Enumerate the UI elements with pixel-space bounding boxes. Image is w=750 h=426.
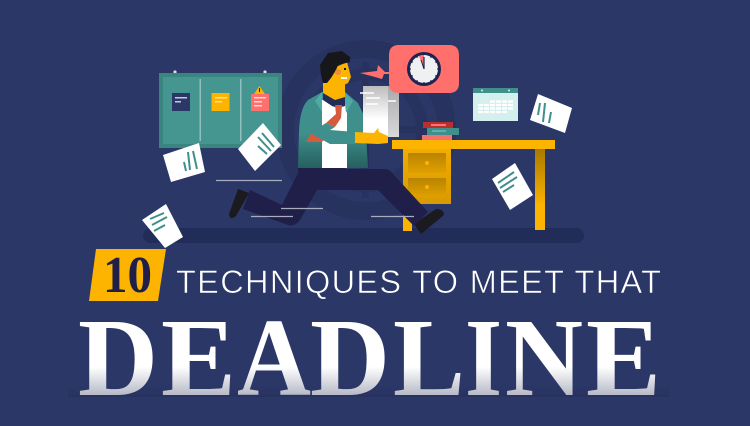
tie tail <box>306 132 328 142</box>
face <box>323 62 351 88</box>
lapel <box>345 92 353 113</box>
hand <box>355 128 388 144</box>
motion lines <box>216 180 414 216</box>
flying paper 5 <box>492 163 533 210</box>
collar <box>323 93 345 108</box>
title: deadline: D <box>78 297 158 420</box>
front shoe <box>414 209 444 234</box>
lapel left <box>315 92 322 112</box>
mouth <box>341 77 347 79</box>
title: deadline: N <box>505 297 583 420</box>
title: deadline: L <box>393 297 465 420</box>
stack of books <box>422 122 459 140</box>
back shoe <box>229 189 249 218</box>
heading: techniques to meet that: TECHNIQUES TO MEET THAT <box>176 264 661 300</box>
wall calendar <box>473 88 518 121</box>
panel: wall board <box>159 70 282 148</box>
cheek <box>335 69 341 75</box>
title band shadow <box>68 385 670 397</box>
title: deadline: E <box>161 297 236 420</box>
note: yellow <box>212 93 230 111</box>
clock <box>407 52 441 86</box>
desk <box>392 140 555 231</box>
jacket <box>298 92 368 168</box>
hair <box>320 51 350 83</box>
running man <box>229 51 444 234</box>
number badge: 10: 10 <box>103 247 152 304</box>
flying paper 4 <box>530 94 572 133</box>
flying paper 1 <box>238 123 281 171</box>
title: deadline: D <box>310 297 390 420</box>
title: deadline <box>78 297 661 420</box>
eye <box>344 68 346 70</box>
paper stack <box>360 86 399 137</box>
background target circle <box>276 40 456 220</box>
flying paper 3 <box>142 204 183 248</box>
tie <box>326 105 342 127</box>
number badge: 10 <box>89 247 166 304</box>
title: deadline: I <box>465 297 502 420</box>
sleeve <box>310 123 355 144</box>
front leg and hips <box>298 169 428 226</box>
title: deadline: A <box>237 297 311 420</box>
back leg <box>243 168 345 225</box>
title: deadline: E <box>586 297 661 420</box>
note: pink with warning <box>251 86 269 111</box>
ground shadow <box>143 228 584 243</box>
flying paper 2 <box>163 143 205 182</box>
shirt <box>322 100 347 168</box>
neck <box>323 80 345 107</box>
speech bubble with clock <box>360 45 459 93</box>
note: navy <box>172 93 190 111</box>
